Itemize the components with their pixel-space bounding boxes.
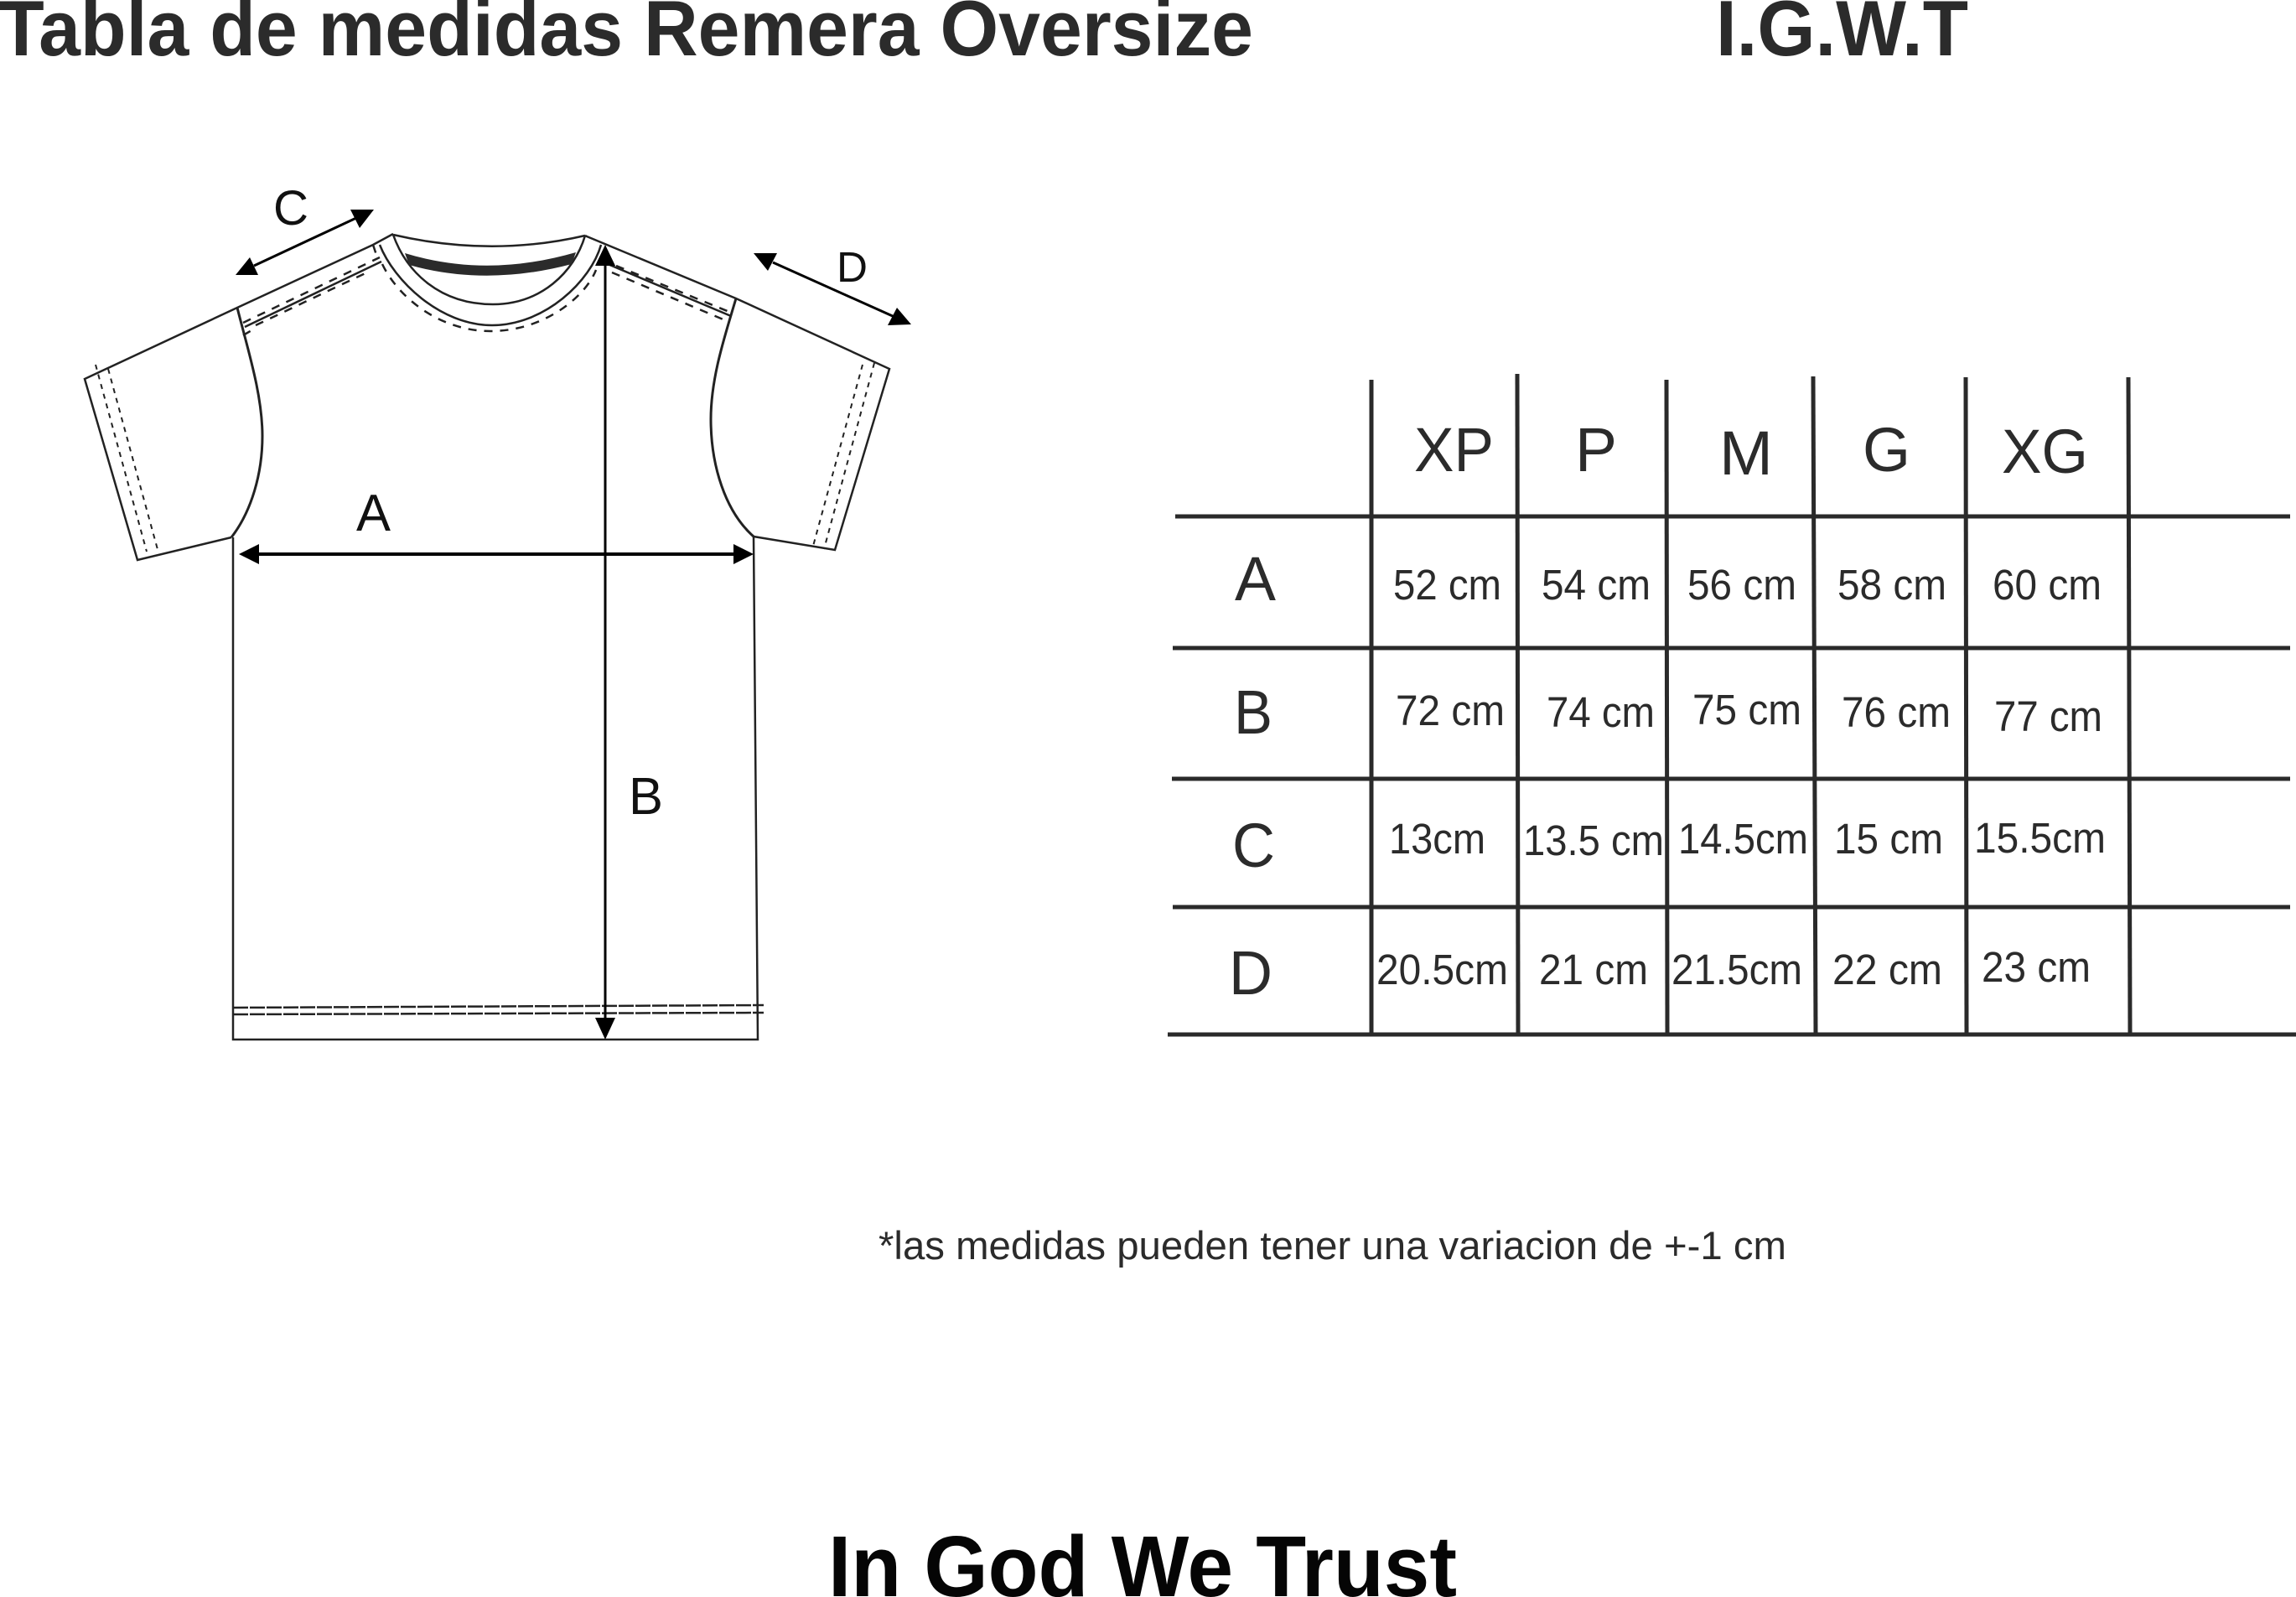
stitching lines <box>96 245 874 1014</box>
row A values: 54 cm <box>1542 561 1651 609</box>
t-shirt diagram <box>85 181 911 1040</box>
row C values <box>1389 814 2106 864</box>
row B values: 74 cm <box>1547 688 1655 736</box>
row D values: 21 cm <box>1539 946 1648 993</box>
row labels: B <box>1234 677 1272 747</box>
diagram letter labels: A <box>356 485 391 542</box>
row C values: 13cm <box>1389 815 1485 863</box>
size table <box>1168 374 2296 1034</box>
size headers: XP <box>1414 415 1494 485</box>
arrow A: chest width <box>239 544 754 564</box>
table grid <box>1168 374 2296 1034</box>
arrow D: sleeve length <box>754 253 911 325</box>
diagram letter labels: D <box>837 243 868 291</box>
row labels: D <box>1229 938 1272 1008</box>
row D values: 21.5cm <box>1671 946 1802 993</box>
row A values: 56 cm <box>1687 561 1796 609</box>
row labels: A <box>1235 544 1277 614</box>
row D values: 22 cm <box>1832 946 1942 993</box>
shirt outline <box>85 234 889 1040</box>
size headers: G <box>1863 415 1910 485</box>
row A values <box>1393 561 2102 609</box>
row B values: 75 cm <box>1692 686 1801 734</box>
neck label band <box>405 252 576 276</box>
row D values: 20.5cm <box>1376 946 1508 993</box>
row B values: 72 cm <box>1396 687 1505 734</box>
row D values <box>1376 943 2091 993</box>
footnote: *las medidas pueden tener una variacion de +-1 cm <box>878 1223 1786 1268</box>
diagram letter labels <box>273 181 868 826</box>
row A values: 52 cm <box>1393 561 1501 609</box>
row B values <box>1396 686 2102 740</box>
diagram letter labels: C <box>273 181 308 236</box>
row C values: 13.5 cm <box>1523 817 1664 864</box>
row A values: 58 cm <box>1837 561 1946 609</box>
size headers: XG <box>2002 417 2088 486</box>
arrow B: body length <box>595 245 615 1040</box>
row labels <box>1229 544 1277 1008</box>
row D values: 23 cm <box>1982 943 2091 991</box>
row C values: 15.5cm <box>1974 814 2106 862</box>
size headers: M <box>1719 418 1773 488</box>
row A values: 60 cm <box>1993 561 2102 609</box>
size headers <box>1414 415 2088 488</box>
diagram letter labels: B <box>629 768 663 826</box>
row C values: 14.5cm <box>1678 815 1808 863</box>
arrow C: shoulder width <box>236 210 374 275</box>
row B values: 76 cm <box>1842 688 1951 736</box>
size headers: P <box>1575 415 1617 485</box>
row labels: C <box>1232 811 1275 880</box>
row B values: 77 cm <box>1994 692 2102 740</box>
row C values: 15 cm <box>1834 815 1943 863</box>
